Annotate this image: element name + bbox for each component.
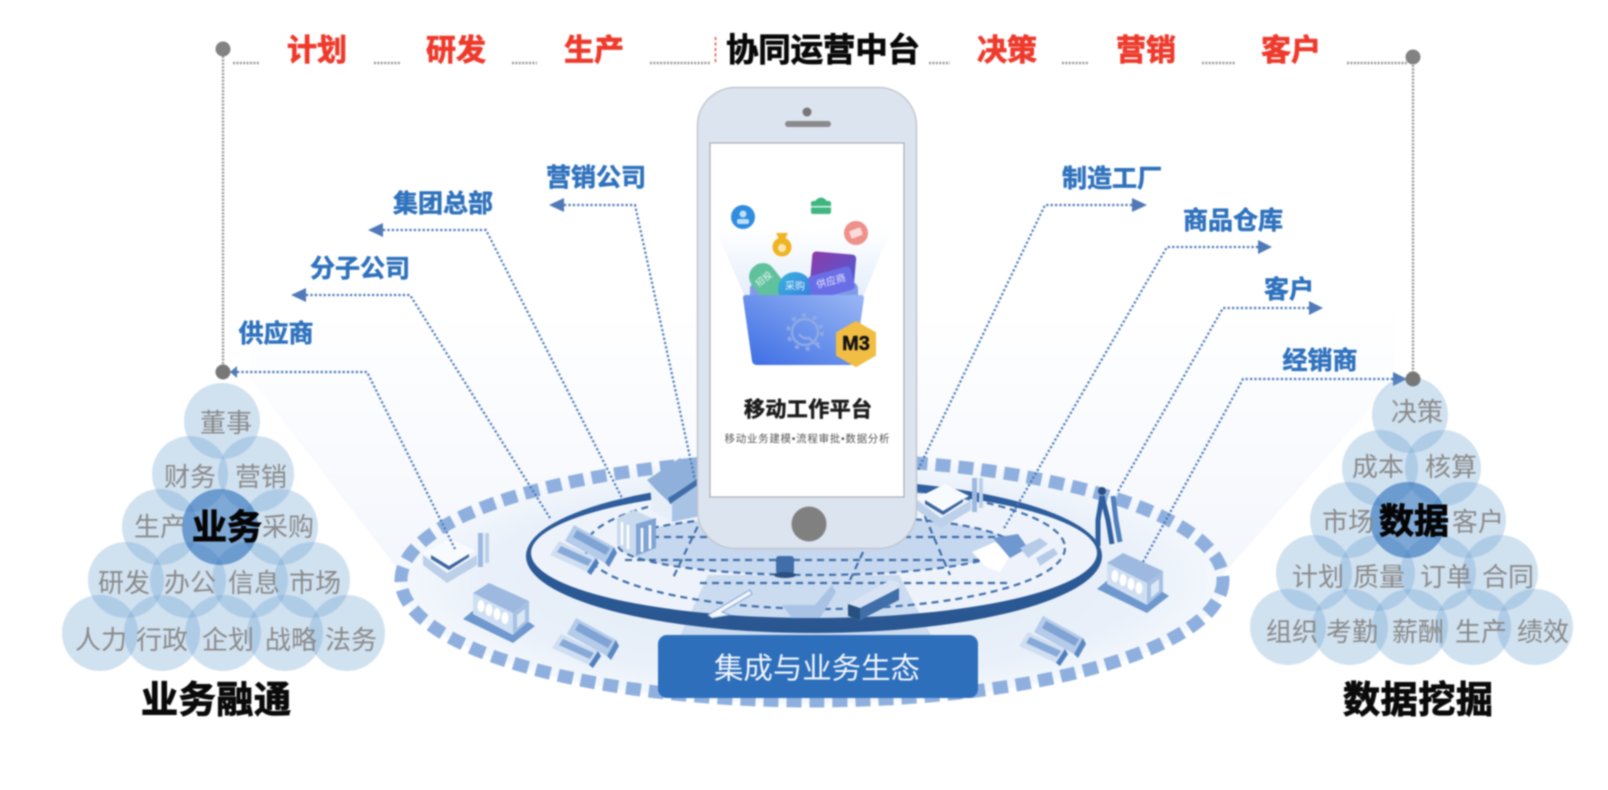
label: subsidiary: 分子公司 — [310, 255, 410, 283]
center word: business: 业务 — [192, 508, 262, 548]
words: business: 采购 — [262, 512, 314, 542]
stage: customer: 客户 — [1261, 34, 1321, 68]
phone — [698, 88, 916, 548]
building: inner left warehouse — [550, 525, 617, 575]
building: head office — [647, 458, 705, 522]
center word: data: 数据 — [1379, 502, 1449, 542]
words: data: 考勤 — [1326, 617, 1378, 647]
vehicle: train — [848, 580, 899, 620]
circle: purchasing: 采购 — [785, 280, 805, 292]
app subtitle: 移动业务建模•流程审批•数据分析 — [724, 432, 890, 445]
words: data — [1266, 397, 1569, 647]
stage: plan: 计划 — [287, 34, 347, 68]
words: data: 客户 — [1452, 507, 1504, 537]
label: warehouse: 商品仓库 — [1183, 207, 1283, 235]
words: business: 办公 — [164, 568, 216, 598]
caption: business fusion: 业务融通 — [141, 680, 291, 720]
icon: briefcase — [811, 198, 831, 214]
words: business: 行政 — [136, 625, 188, 655]
background light fan — [250, 300, 1395, 572]
left node — [216, 42, 230, 56]
back folder tab — [750, 282, 858, 302]
right vertical connector — [1412, 65, 1414, 372]
integration banner — [658, 635, 978, 698]
building: outer left warehouse — [552, 618, 619, 668]
words: data: 决策 — [1391, 397, 1443, 427]
integration banner: 集成与业务生态 — [714, 652, 920, 686]
words: business: 生产 — [134, 512, 186, 542]
vehicle: cargo drum — [774, 556, 796, 578]
connector: subsidiary — [306, 295, 550, 518]
central title: 协同运营中台 — [726, 31, 920, 68]
connector dotted lines — [230, 198, 1407, 562]
home button — [792, 506, 826, 542]
pill: bidding — [744, 258, 792, 309]
stage: marketing: 营销 — [1116, 34, 1176, 68]
words: business — [75, 408, 377, 655]
words: business: 研发 — [98, 568, 150, 598]
words: data: 核算 — [1425, 452, 1477, 482]
label: group headquarters: 集团总部 — [393, 190, 493, 218]
top process bar — [216, 31, 1420, 372]
words: data: 订单 — [1420, 562, 1472, 592]
card: supplier — [807, 266, 856, 300]
card: purple — [810, 251, 856, 291]
words: business: 董事 — [200, 408, 252, 438]
stage: R&D: 研发 — [426, 34, 486, 68]
circles: data — [1250, 377, 1573, 665]
words: data: 生产 — [1455, 617, 1507, 647]
connector: group HQ — [383, 230, 623, 500]
words: data: 质量 — [1353, 562, 1405, 592]
words: data: 成本 — [1352, 452, 1404, 482]
label: distributor: 经销商 — [1282, 347, 1358, 375]
light beam — [715, 228, 892, 297]
badge: M3: M3 — [842, 333, 870, 355]
connector: customer — [1117, 308, 1309, 493]
building: right store — [1097, 553, 1169, 613]
disc surface — [399, 456, 1225, 704]
words: data: 合同 — [1482, 562, 1534, 592]
vehicle: ship — [782, 585, 836, 618]
dark ring — [526, 479, 1102, 633]
label: supplier: 供应商 — [238, 319, 314, 348]
icon: gear and wrench — [788, 315, 822, 349]
building: left store — [463, 583, 535, 643]
words: data: 市场 — [1322, 507, 1374, 537]
speaker — [785, 121, 831, 127]
building: right factory — [917, 478, 983, 528]
red dashed tick — [714, 37, 716, 63]
phone body — [698, 88, 916, 548]
words: business: 战略 — [265, 625, 317, 655]
icon: money bag — [772, 233, 792, 256]
inner plate — [529, 486, 1099, 626]
inner hub — [618, 515, 1010, 575]
camera — [802, 108, 812, 116]
label: customer: 客户 — [1264, 275, 1314, 304]
route network — [585, 487, 1065, 609]
top dotted segments — [233, 62, 1408, 64]
light cone — [660, 575, 955, 680]
words: business: 法务 — [325, 625, 377, 655]
stage: decision: 决策 — [977, 34, 1037, 68]
left vertical connector — [222, 56, 224, 366]
figure: people — [1098, 487, 1120, 546]
words: data: 组织 — [1266, 617, 1318, 647]
ecosystem platform disc — [399, 456, 1225, 704]
words: business: 企划 — [202, 625, 254, 655]
building: right warehouse cluster — [972, 534, 1058, 572]
words: data: 薪酬 — [1392, 617, 1444, 647]
words: business: 营销 — [235, 462, 287, 492]
connector: distributor — [1143, 379, 1393, 562]
connector: supplier — [237, 372, 455, 549]
circle: purchasing — [778, 272, 812, 306]
right junction node — [1406, 372, 1420, 386]
words: data: 绩效 — [1517, 617, 1569, 647]
vehicle: airplane — [708, 590, 752, 618]
icon: coupon — [844, 221, 868, 245]
connector: marketing company — [564, 205, 695, 480]
words: business: 市场 — [289, 568, 341, 598]
connector: factory — [918, 205, 1132, 470]
arrowheads — [230, 198, 1407, 386]
words: data: 计划 — [1292, 562, 1344, 592]
label: marketing company: 营销公司 — [546, 164, 646, 192]
building: outer right warehouse — [1019, 616, 1086, 666]
screen — [710, 143, 904, 497]
app title: 移动工作平台 — [744, 398, 872, 422]
left junction node — [216, 364, 230, 380]
circles: business — [62, 383, 385, 671]
building: office tower — [617, 510, 656, 556]
words: business: 财务 — [164, 462, 216, 492]
stage: production: 生产 — [564, 34, 624, 68]
panel: business pyramid — [62, 383, 385, 720]
app illustration — [715, 198, 892, 366]
card: supplier: 供应商 — [815, 271, 847, 291]
caption: data mining: 数据挖掘 — [1343, 680, 1493, 720]
pill: bidding: 招投 — [753, 269, 774, 289]
words: business: 信息 — [228, 568, 280, 598]
right node — [1406, 50, 1420, 64]
connector: warehouse — [1003, 247, 1258, 530]
label: factory: 制造工厂 — [1062, 165, 1162, 193]
building: left factory — [423, 533, 489, 583]
disc edge ticks — [401, 459, 1223, 701]
words: business: 人力 — [75, 625, 127, 655]
panel: data pyramid — [1250, 372, 1573, 720]
badge: M3 — [837, 322, 875, 366]
icon: person — [731, 205, 755, 229]
folder — [743, 295, 864, 365]
